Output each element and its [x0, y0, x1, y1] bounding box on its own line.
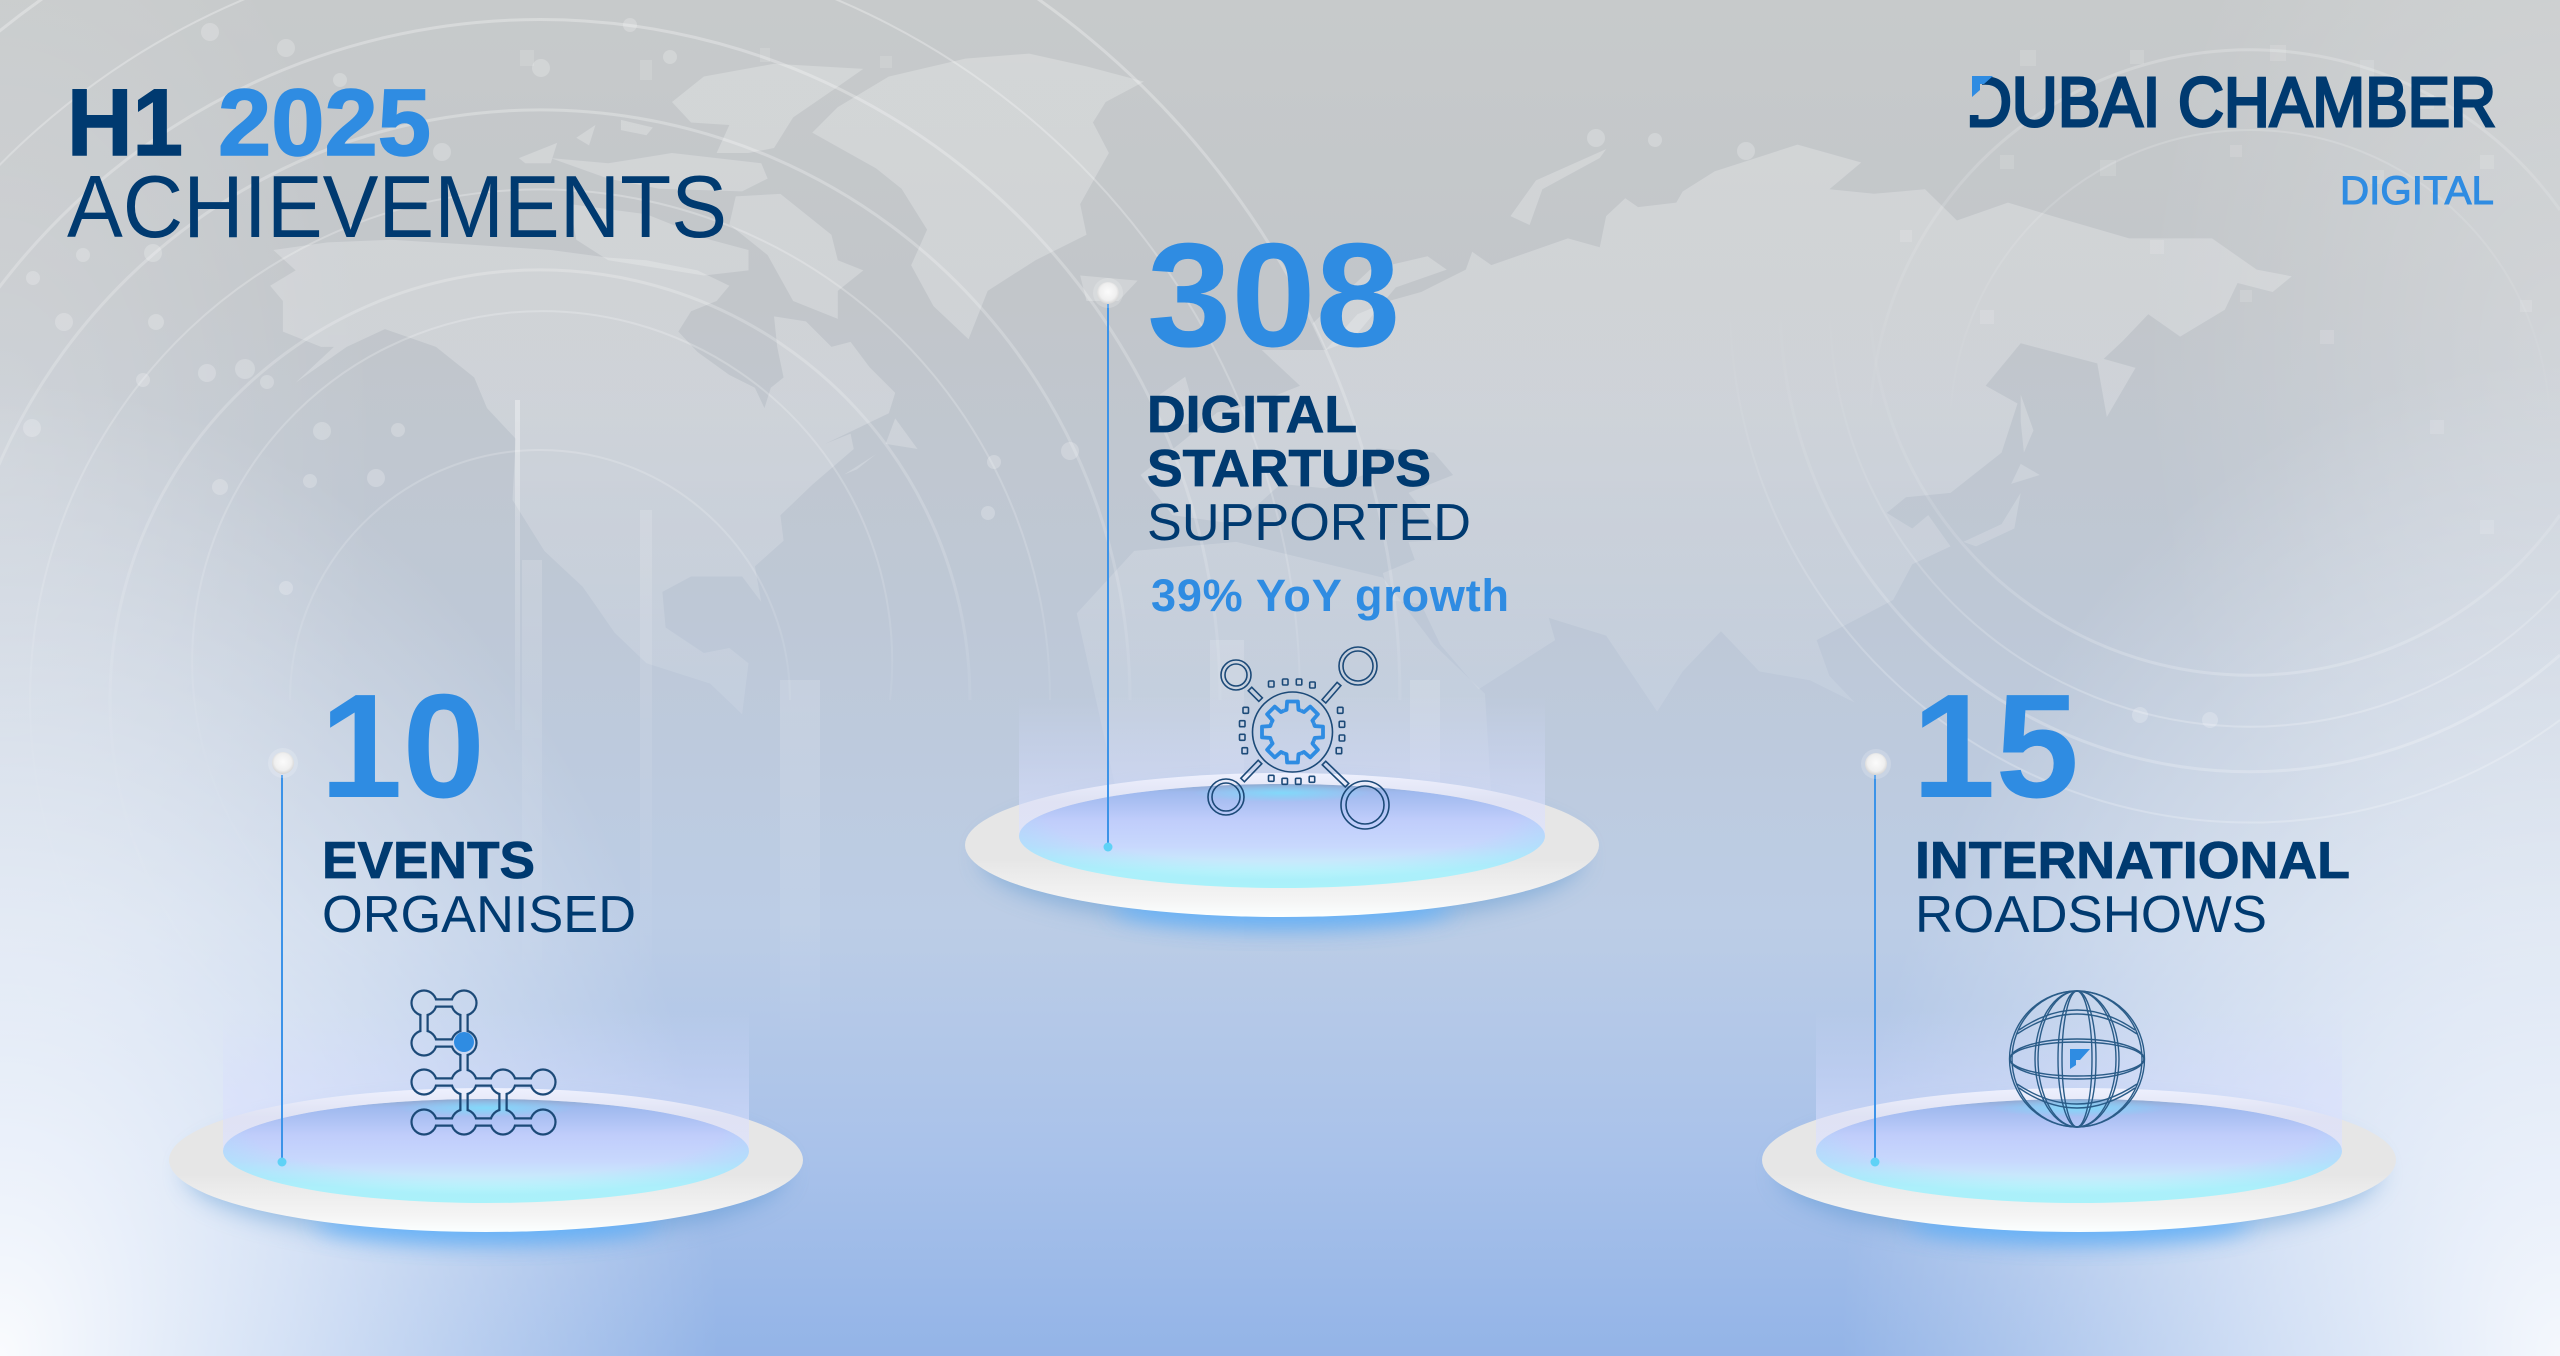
icon: wireframe globe: [2010, 991, 2144, 1127]
stat: digital startups supported: DIGITAL: [1147, 385, 1357, 443]
network arcs and nodes: [0, 0, 2560, 1000]
icon: gear network: [1208, 647, 1389, 829]
stat: digital startups supported: 308: [1147, 213, 1400, 378]
logo: Dubai Chamber Digital: [1970, 76, 2496, 205]
title: [67, 70, 727, 256]
title: ACHIEVEMENTS: [67, 157, 727, 256]
logo: Dubai Chamber Digital: DUBAI CHAMBER: [1966, 63, 2496, 141]
stat: digital startups supported: 39% YoY growth: [1151, 570, 1509, 621]
world map: [270, 54, 2292, 814]
stat: events organised: EVENTS: [322, 831, 535, 889]
title: 2025: [218, 70, 431, 176]
pin: startups: [1093, 278, 1123, 852]
stat: digital startups supported: [1147, 213, 1509, 621]
icon: molecule network: [410, 989, 557, 1136]
stat: international roadshows: 15: [1912, 664, 2079, 829]
stat: events organised: 10: [320, 664, 485, 829]
stat: digital startups supported: SUPPORTED: [1147, 493, 1471, 551]
map: Americas and Greenland: [270, 54, 1144, 714]
stat: international roadshows: ROADSHOWS: [1915, 885, 2267, 943]
map: Eurasia and Africa: [1077, 145, 2292, 814]
data specks and skyline bars: [515, 45, 2532, 1030]
stat: international roadshows: [1912, 664, 2350, 943]
title: H1: [67, 70, 183, 176]
platform: centre: [965, 695, 1599, 927]
logo: Dubai Chamber Digital: DIGITAL: [2340, 169, 2494, 213]
platform: right: [1762, 1010, 2396, 1242]
stat: events organised: [320, 664, 636, 943]
stat: digital startups supported: STARTUPS: [1147, 439, 1431, 497]
pin: events: [268, 748, 298, 1166]
pin: roadshows: [1861, 749, 1891, 1166]
platform: left: [169, 1010, 803, 1242]
stat: international roadshows: INTERNATIONAL: [1915, 831, 2350, 889]
stat: events organised: ORGANISED: [322, 885, 636, 943]
